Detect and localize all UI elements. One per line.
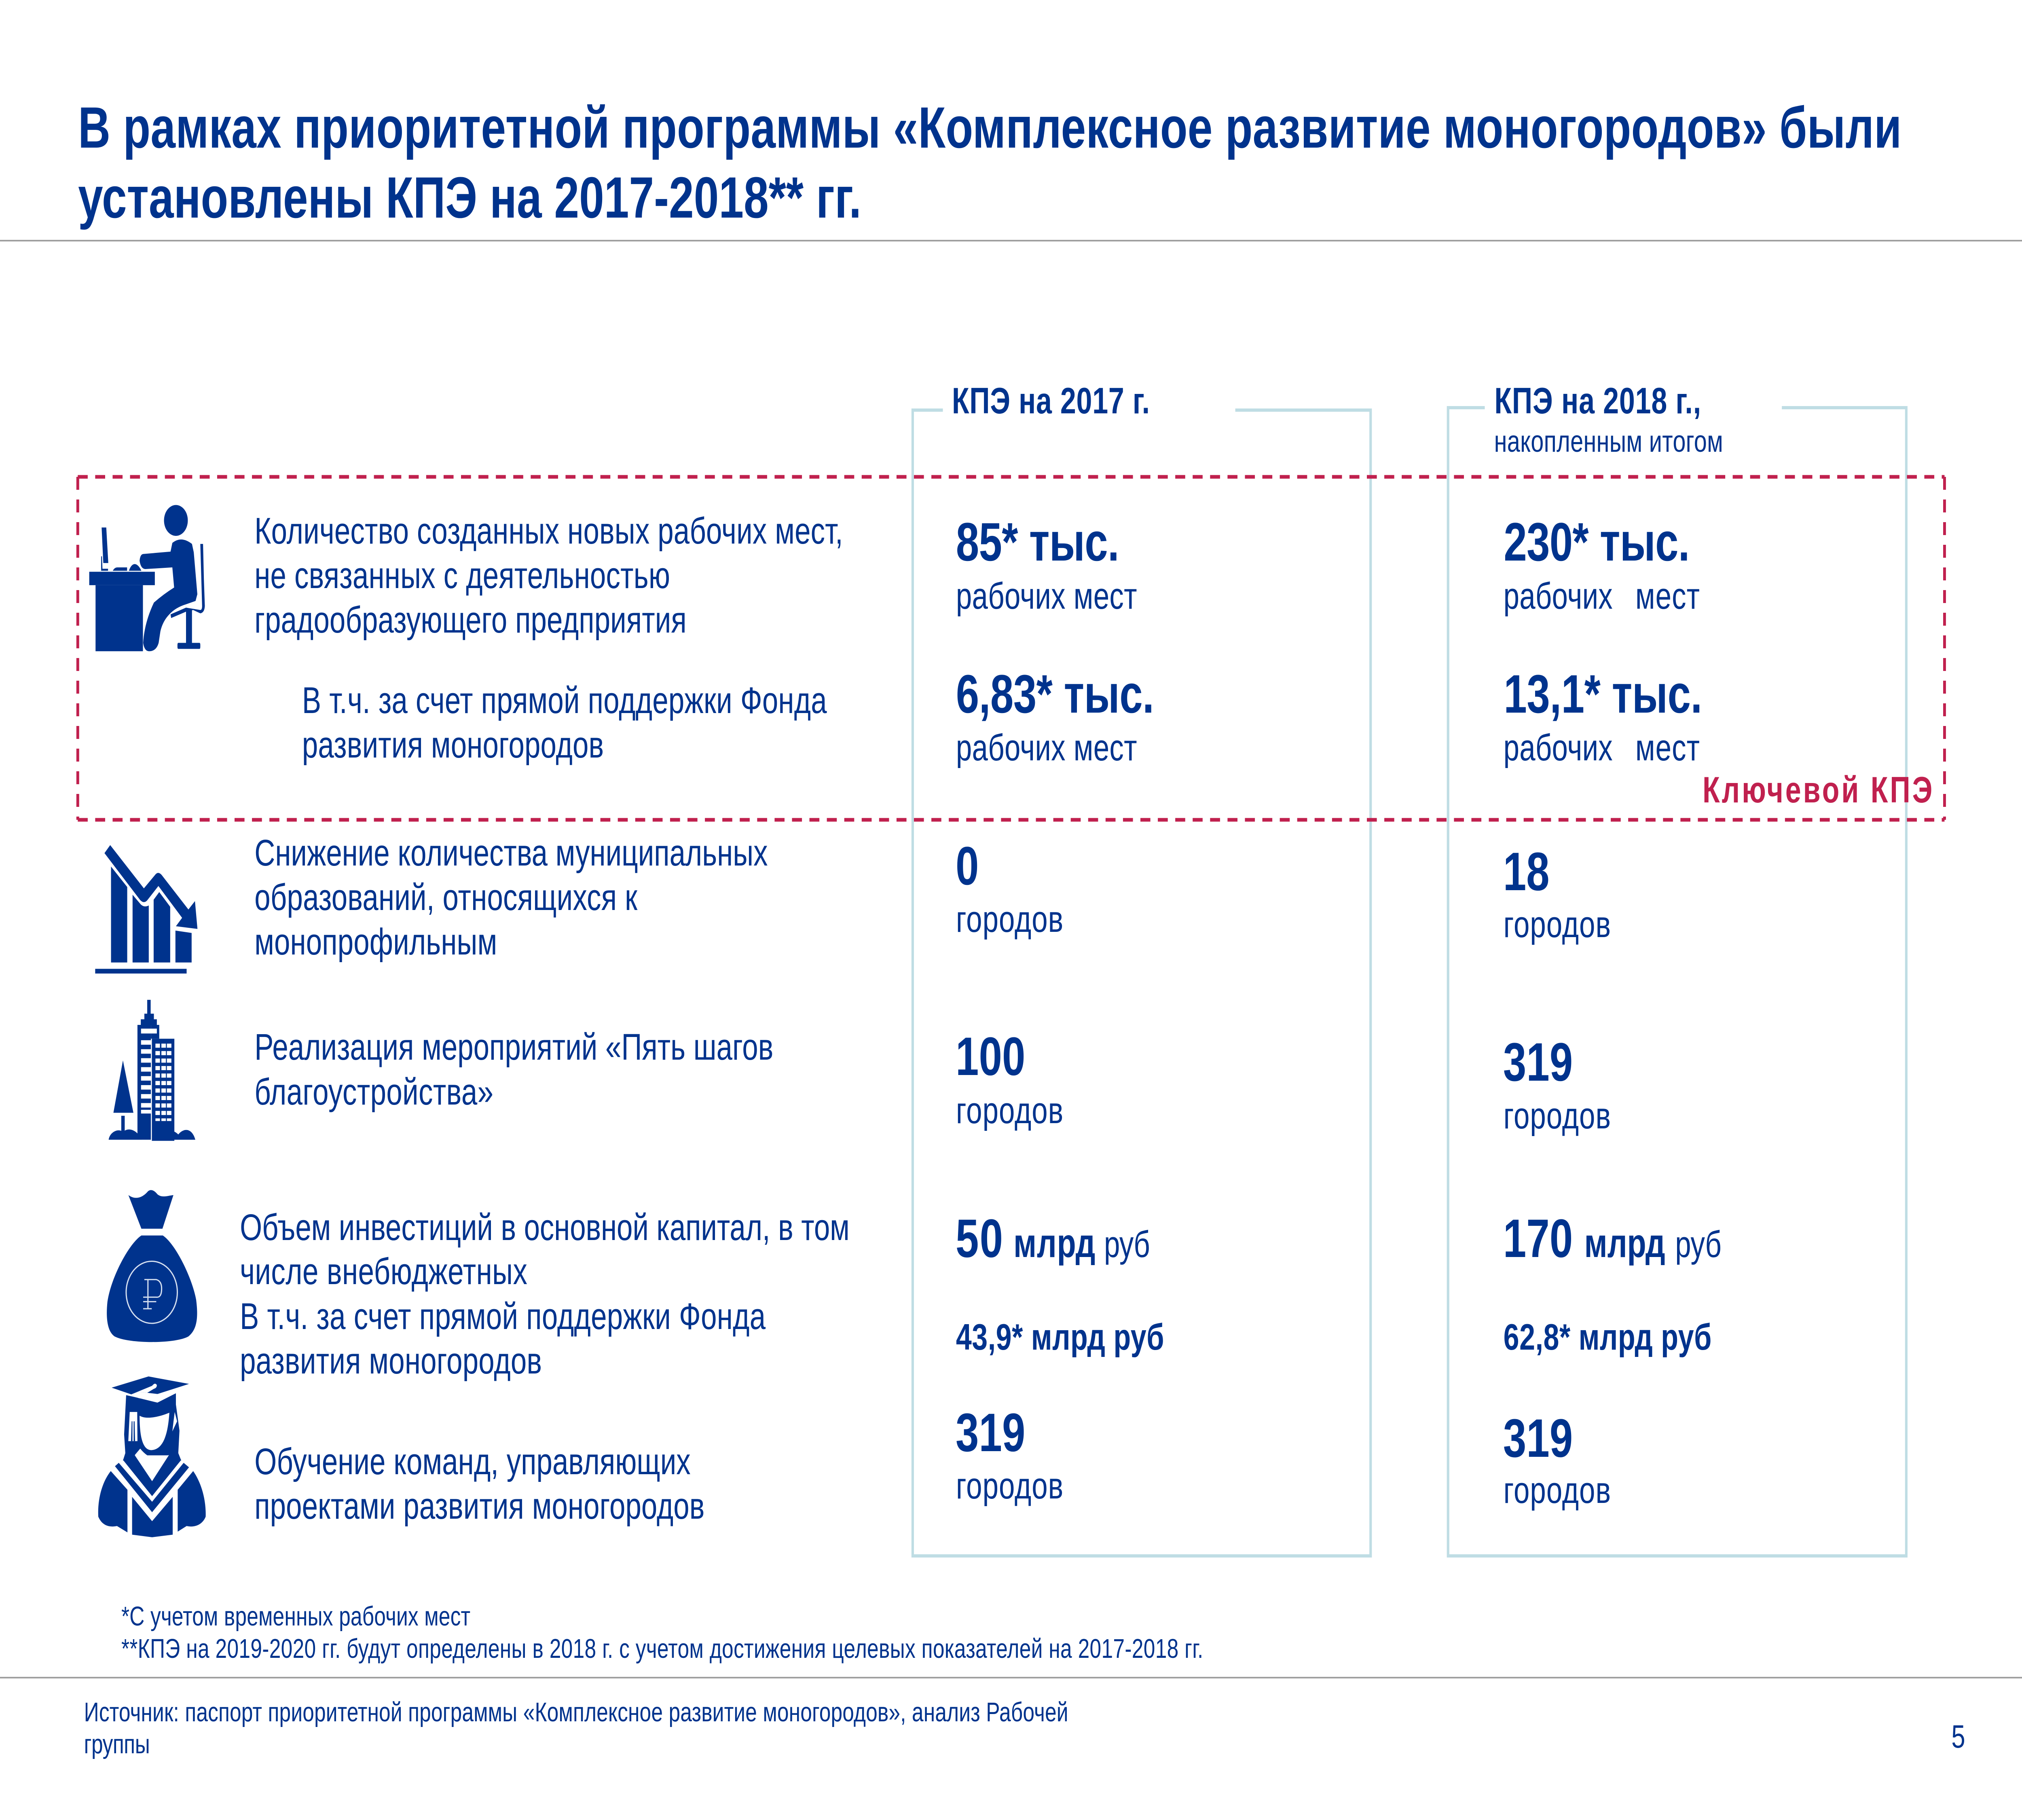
value: 230 thousand jobs <box>1504 512 1700 617</box>
panel frame: KPI 2018 <box>1448 408 1906 1556</box>
footnotes: **КПЭ на 2019-2020 гг. будут определены в 2018 г. с учетом достижения целевых показателей на 2017-2018 гг. <box>121 1633 1203 1664</box>
value: 13.1 thousand jobs: мест <box>1635 727 1700 768</box>
value: 13.1 thousand jobs: 13,1* тыс. <box>1504 664 1702 724</box>
value: 230 thousand jobs: рабочих <box>1504 576 1613 617</box>
value: 170 billion rubles: руб <box>1675 1224 1722 1265</box>
value: 319 towns <box>956 1403 1063 1507</box>
text: investment description: числе внебюджетных <box>240 1251 527 1292</box>
callout frame: key KPI dashed border <box>78 477 1944 820</box>
value: 0 towns: 0 <box>956 836 979 896</box>
value: 0 towns: городов <box>956 899 1063 940</box>
icon: person at desk <box>89 505 205 651</box>
value: 230 thousand jobs: мест <box>1635 576 1700 617</box>
value: 319 towns: 319 <box>1503 1408 1573 1469</box>
value: 6.83 thousand jobs <box>956 664 1154 768</box>
text: investment description: В т.ч. за счет прямой поддержки Фонда <box>240 1296 766 1337</box>
value: 170 billion rubles <box>1503 1208 1722 1269</box>
value: 85 thousand jobs <box>956 512 1137 617</box>
value: 170 billion rubles: млрд <box>1584 1220 1665 1266</box>
text: five steps description: Реализация мероприятий «Пять шагов <box>254 1026 773 1068</box>
value: 18 towns <box>1503 842 1611 945</box>
footnotes <box>121 1601 1203 1664</box>
heading: KPI 2018 cumulative: КПЭ на 2018 г., <box>1494 381 1701 421</box>
value: 13.1 thousand jobs: рабочих <box>1504 727 1613 768</box>
value: 319 towns <box>1503 1032 1611 1136</box>
text: team training description: Обучение команд, управляющих <box>254 1441 691 1482</box>
title: В рамках приоритетной программы «Комплексное развитие моногородов» были <box>78 95 1901 160</box>
text: Fund support jobs description: В т.ч. за счет прямой поддержки Фонда <box>302 680 827 721</box>
callout: key KPI label: Ключевой КПЭ <box>1703 770 1932 811</box>
source note: группы <box>84 1729 150 1759</box>
value: 62.8 billion rubles: 62,8* млрд руб <box>1504 1317 1711 1358</box>
value: 100 towns <box>956 1026 1063 1131</box>
icon: city buildings <box>109 1000 195 1141</box>
value: 319 towns: 319 <box>1503 1032 1573 1092</box>
text: monotown reduction description: образований, относящихся к <box>254 877 638 918</box>
heading: KPI 2017: КПЭ на 2017 г. <box>952 381 1150 421</box>
page number: 5 <box>1951 1718 1965 1755</box>
value: 85 thousand jobs: 85* тыс. <box>956 512 1119 572</box>
title <box>78 95 1901 230</box>
value: 50 billion rubles: 50 <box>956 1208 1003 1269</box>
value: 319 towns <box>1503 1408 1611 1511</box>
text: five steps description <box>254 1026 773 1113</box>
text: team training description: проектами развития моногородов <box>254 1486 704 1527</box>
value: 230 thousand jobs: 230* тыс. <box>1504 512 1690 572</box>
value: 6.83 thousand jobs: 6,83* тыс. <box>956 664 1154 724</box>
value: 6.83 thousand jobs: рабочих мест <box>956 727 1137 768</box>
value: 100 towns: городов <box>956 1090 1063 1131</box>
text: new jobs KPI description: не связанных с деятельностью <box>254 555 670 596</box>
text: investment description: развития моногородов <box>240 1340 542 1382</box>
text: monotown reduction description: Снижение количества муниципальных <box>254 832 768 874</box>
panel: KPI 2017 values <box>952 381 1164 1507</box>
heading: KPI 2018 cumulative: накопленным итогом <box>1494 425 1723 459</box>
value: 319 towns: городов <box>1504 1470 1611 1511</box>
icon: graduate <box>98 1376 206 1537</box>
value: 18 towns: 18 <box>1503 842 1550 902</box>
text: investment description: Объем инвестиций в основной капитал, в том <box>240 1207 850 1248</box>
text: monotown reduction description <box>254 832 768 963</box>
value: 43.9 billion rubles: 43,9* млрд руб <box>956 1317 1164 1358</box>
text: investment description <box>240 1207 850 1382</box>
value: 18 towns: городов <box>1504 904 1611 945</box>
heading: KPI 2018 cumulative <box>1494 381 1723 459</box>
value: 100 towns: 100 <box>956 1026 1025 1087</box>
value: 0 towns <box>956 836 1063 940</box>
text: five steps description: благоустройства» <box>254 1071 493 1113</box>
text: new jobs KPI description: Количество созданных новых рабочих мест, <box>254 510 843 552</box>
value: 50 billion rubles <box>956 1208 1150 1269</box>
value: 319 towns: городов <box>956 1465 1063 1507</box>
value: 50 billion rubles: руб <box>1104 1224 1150 1265</box>
footnotes: *С учетом временных рабочих мест <box>121 1601 470 1632</box>
panel: KPI 2018 values <box>1494 381 1932 1511</box>
source note <box>84 1697 1068 1759</box>
panel frame: KPI 2017 <box>913 410 1371 1556</box>
value: 50 billion rubles: млрд <box>1013 1220 1095 1266</box>
value: 319 towns: городов <box>1504 1095 1611 1136</box>
value: 170 billion rubles: 170 <box>1503 1208 1573 1269</box>
text: new jobs KPI description: градообразующего предприятия <box>254 599 687 641</box>
value: 85 thousand jobs: рабочих мест <box>956 576 1137 617</box>
text: Fund support jobs description: развития моногородов <box>302 724 604 766</box>
icon: declining chart <box>95 845 197 973</box>
text: monotown reduction description: монопрофильным <box>254 921 497 963</box>
text: new jobs KPI description <box>254 510 843 641</box>
value: 13.1 thousand jobs <box>1504 664 1702 768</box>
title: установлены КПЭ на 2017-2018** гг. <box>78 165 861 230</box>
text: team training description <box>254 1441 704 1527</box>
source note: Источник: паспорт приоритетной программы «Комплексное развитие моногородов», анализ Рабочей <box>84 1697 1068 1727</box>
icon: money bag with ruble <box>107 1190 197 1342</box>
value: 319 towns: 319 <box>956 1403 1025 1463</box>
text: Fund support jobs description <box>302 680 827 766</box>
